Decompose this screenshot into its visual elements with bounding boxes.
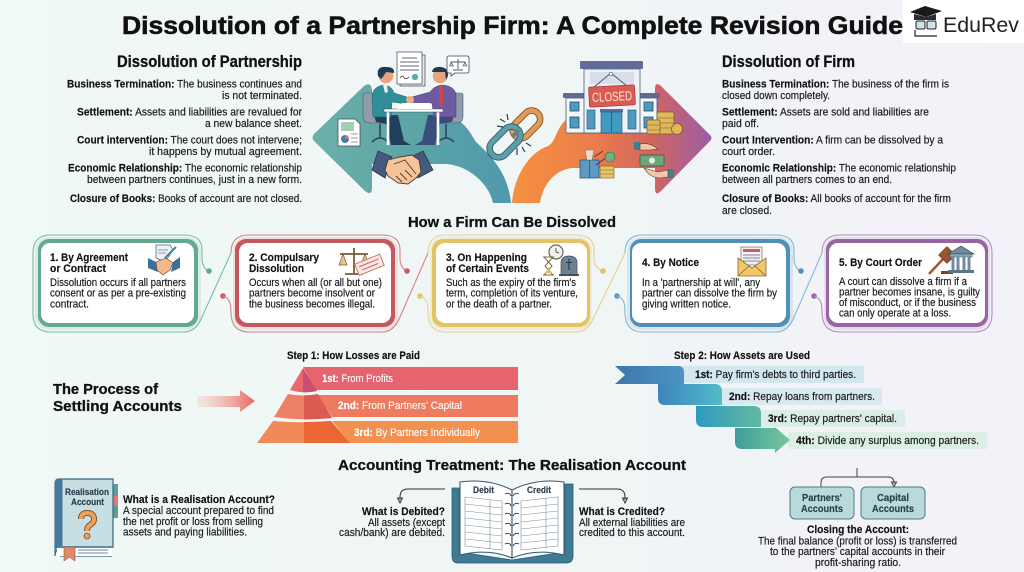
panel: card 3 on happening of certain events: 3. On Happening (446, 252, 527, 264)
right partner (412, 85, 456, 117)
icon: market stall and coin growth (580, 150, 615, 178)
text block: what is a realisation account (123, 494, 275, 538)
table (388, 112, 438, 145)
panel: card 3 on happening of certain events (417, 235, 625, 332)
panel: dissolution of firm (722, 53, 956, 217)
chart: step 1 how losses are paid (257, 350, 518, 443)
box: partners' accounts: Partners' (802, 493, 842, 504)
text block: firm comparison points: closed down completely. (722, 90, 830, 102)
text block: firm comparison points: between all partners comes to an end. (722, 174, 892, 186)
illustration: two partners shaking hands at a table (363, 67, 463, 145)
text block: closing the account: profit-sharing ratio. (815, 557, 901, 569)
text block: what is credited (579, 506, 685, 539)
icon: hourglass clock and gravestone (543, 245, 579, 276)
panel: card 4 by notice: In a 'partnership at will', any (642, 277, 760, 289)
panel: card 1 by agreement or contract: consent or as per a pre-existing (50, 288, 186, 300)
text block: partnership comparison points: between partners continues, just in a new form. (87, 174, 302, 186)
heading: how a firm can be dissolved: How a Firm Can Be Dissolved (408, 214, 616, 231)
icon: large handshake (372, 151, 433, 184)
icon: hands exchanging money (634, 142, 674, 178)
text block: what is debited (339, 506, 445, 539)
panel: card 3 on happening of certain events: term, completion of its venture, (446, 288, 578, 300)
panel: card 1 by agreement or contract (33, 235, 231, 332)
box: partners' accounts (790, 487, 854, 519)
text block: firm comparison points: Court Intervention: A firm can be dissolved by a (722, 134, 944, 146)
panel: card 1 by agreement or contract: 1. By Agreement (50, 252, 128, 264)
text block: what is a realisation account: What is a Realisation Account? (123, 494, 275, 506)
icon: open ledger book (452, 481, 573, 563)
legs (374, 115, 411, 145)
box: capital accounts: Accounts (872, 504, 914, 515)
panel: card 3 on happening of certain events: or the death of a partner. (446, 298, 552, 310)
pyramid tier 1: 1st: From Profits (322, 373, 393, 385)
icon: scales and stamp (339, 248, 384, 275)
panel: card 1 by agreement or contract: or Contract (50, 263, 106, 275)
text block: closing the account: to the partners' capital accounts in their (770, 546, 945, 558)
text block: what is debited: cash/bank) are debited. (339, 527, 445, 539)
arrow: to credited (579, 489, 628, 503)
arrow: teal left arrow (312, 84, 511, 203)
text block: closing the account: Closing the Account: (807, 524, 909, 536)
title: Dissolution of a Partnership Firm: A Complete Revision Guide (122, 12, 903, 40)
icon: broken chain link (486, 107, 544, 161)
text block: what is credited: All external liabilities are (579, 517, 685, 529)
text block: partnership comparison points: Court intervention: The court does not intervene; (77, 134, 302, 146)
text block: firm comparison points: Business Termination: The business of the firm is (722, 78, 949, 90)
text block: closing the account: The final balance (profit or loss) is transferred (758, 536, 957, 548)
chart: step 2 how assets are used (615, 350, 987, 453)
panel: card 2 compulsary dissolution: Occurs when all (or all but one) (249, 277, 382, 289)
icon: handshake and contract (148, 245, 180, 275)
ledger lines (465, 497, 558, 550)
text block: partnership comparison points: a new balance sheet. (205, 118, 302, 130)
arrow: to debited (398, 489, 445, 503)
panel: card 5 by court order: 5. By Court Order (839, 257, 923, 269)
heading: the process of settling accounts: Settling Accounts (53, 399, 182, 415)
text block: firm comparison points: Economic Relationship: The economic relationship (722, 162, 956, 174)
logo: EduRev: EduRev (943, 14, 1019, 37)
panel: card 2 compulsary dissolution: Dissolution (249, 263, 304, 275)
arrow: process arrow to step 1 (197, 390, 255, 412)
icon: open ledger book: Credit (527, 485, 551, 495)
pyramid tier 1 (290, 367, 518, 392)
heading: the process of settling accounts (53, 382, 182, 415)
pyramid tier 2 (274, 394, 518, 420)
text block: partnership comparison points: is not terminated. (222, 90, 302, 102)
text block: firm comparison points: Settlement: Assets are sold and liabilities are (722, 106, 929, 118)
icon: signed document (397, 52, 425, 86)
heading: the process of settling accounts: The Process of (53, 382, 158, 398)
panel: card 4 by notice: partner can dissolve the firm by (642, 288, 777, 300)
panel: card 5 by court order: can only operate at a loss. (839, 308, 951, 320)
text block: partnership comparison points: Settlement: Assets and liabilities are revalued for (77, 106, 302, 118)
heading: dissolution of partnership: Dissolution of Partnership (117, 53, 302, 71)
panel: card 5 by court order: A court can dissolve a firm if a (839, 276, 968, 288)
text block: partnership comparison points: it happens by mutual agreement. (149, 146, 302, 158)
text block: what is a realisation account: assets and paying liabilities. (123, 526, 247, 538)
step 2 tier 3 (696, 406, 905, 427)
box: partners' accounts: Accounts (801, 504, 843, 515)
logo: EduRev (903, 0, 1024, 43)
box: capital accounts (861, 487, 925, 519)
text block: firm comparison points: court order. (722, 146, 775, 158)
heading: dissolution of firm: Dissolution of Firm (722, 53, 855, 71)
text block: closing the account (758, 524, 957, 569)
text block: firm comparison points: are closed. (722, 205, 772, 217)
step 2 tier 1 (615, 366, 864, 384)
icon: notice in envelope (738, 247, 766, 276)
heading: accounting treatment: Accounting Treatment: The Realisation Account (338, 457, 686, 474)
icon: gavel and courthouse (929, 246, 974, 274)
icon: scale speech bubble (447, 56, 469, 76)
chart: step 2 how assets are used: Step 2: How Assets are Used (674, 350, 810, 362)
text block: what is debited: What is Debited? (362, 506, 445, 518)
panel: card 4 by notice (614, 235, 822, 332)
text block: firm comparison points: paid off. (722, 118, 759, 130)
text block: partnership comparison points: Business Termination: The business continues and (67, 78, 302, 90)
panel: card 1 by agreement or contract: contract. (50, 298, 89, 310)
chart: step 1 how losses are paid: Step 1: How Losses are Paid (287, 350, 420, 362)
arrow: orange to purple right arrow (512, 84, 712, 203)
panel: card 5 by court order (811, 235, 992, 332)
step 2 tier 1: 1st: Pay firm's debts to third parties. (695, 369, 856, 381)
icon: realisation account book (54, 479, 118, 561)
text block: what is a realisation account: A special account prepared to find (123, 505, 274, 517)
pyramid tier 2: 2nd: From Partners' Capital (338, 400, 462, 412)
icon: open ledger book: Debit (473, 485, 494, 495)
icon: report document (338, 119, 360, 146)
text block: what is debited: All assets (except (368, 517, 445, 529)
panel: card 2 compulsary dissolution: 2. Compulsary (249, 252, 320, 264)
text block: firm comparison points (722, 78, 956, 217)
arrow: closing account bracket (821, 468, 896, 487)
pyramid tier 3: 3rd: By Partners Individually (354, 427, 480, 439)
sign: closed: CLOSED (592, 88, 632, 105)
step 2 tier 4: 4th: Divide any surplus among partners. (796, 435, 979, 447)
box: capital accounts: Capital (877, 493, 909, 504)
panel: card 5 by court order: of misconduct, or if the business (839, 297, 976, 309)
panel: card 5 by court order: partner becomes insane, is guilty (839, 286, 980, 298)
step 2 tier 4 (735, 427, 987, 453)
icon: realisation account book: Realisation (65, 487, 109, 497)
text block: firm comparison points: Closure of Books: All books of account for the firm (722, 193, 951, 205)
panel: card 2 compulsary dissolution: the business becomes illegal. (249, 298, 375, 310)
icon: coins (647, 112, 682, 134)
panel: card 4 by notice: giving written notice. (642, 298, 731, 310)
text block: partnership comparison points: Closure of Books: Books of account are not closed. (70, 193, 302, 205)
panel: card 3 on happening of certain events: of Certain Events (446, 263, 529, 275)
panel: card 1 by agreement or contract: Dissolution occurs if all partners (50, 277, 186, 289)
icon: closed building (563, 61, 660, 133)
left partner (372, 85, 407, 117)
text block: partnership comparison points (67, 78, 302, 205)
panel: card 2 compulsary dissolution: partners become insolvent or (249, 288, 375, 300)
panel: card 4 by notice: 4. By Notice (642, 257, 699, 269)
text block: what is a realisation account: the net profit or loss from selling (123, 516, 263, 528)
chairs (363, 93, 392, 123)
pyramid tier 3 (257, 421, 518, 443)
panel: dissolution of partnership (67, 53, 302, 205)
step 2 tier 2: 2nd: Repay loans from partners. (729, 391, 875, 403)
panel: card 3 on happening of certain events: Such as the expiry of the firm's (446, 277, 576, 289)
icon: realisation account book: Account (71, 497, 104, 507)
text block: what is credited: credited to this account. (579, 527, 685, 539)
panel: card 2 compulsary dissolution (220, 235, 428, 332)
text block: partnership comparison points: Economic Relationship: The economic relationship (68, 162, 302, 174)
text block: what is credited: What is Credited? (579, 506, 665, 518)
step 2 tier 3: 3rd: Repay partners' capital. (768, 413, 897, 425)
step 2 tier 2 (658, 384, 882, 405)
